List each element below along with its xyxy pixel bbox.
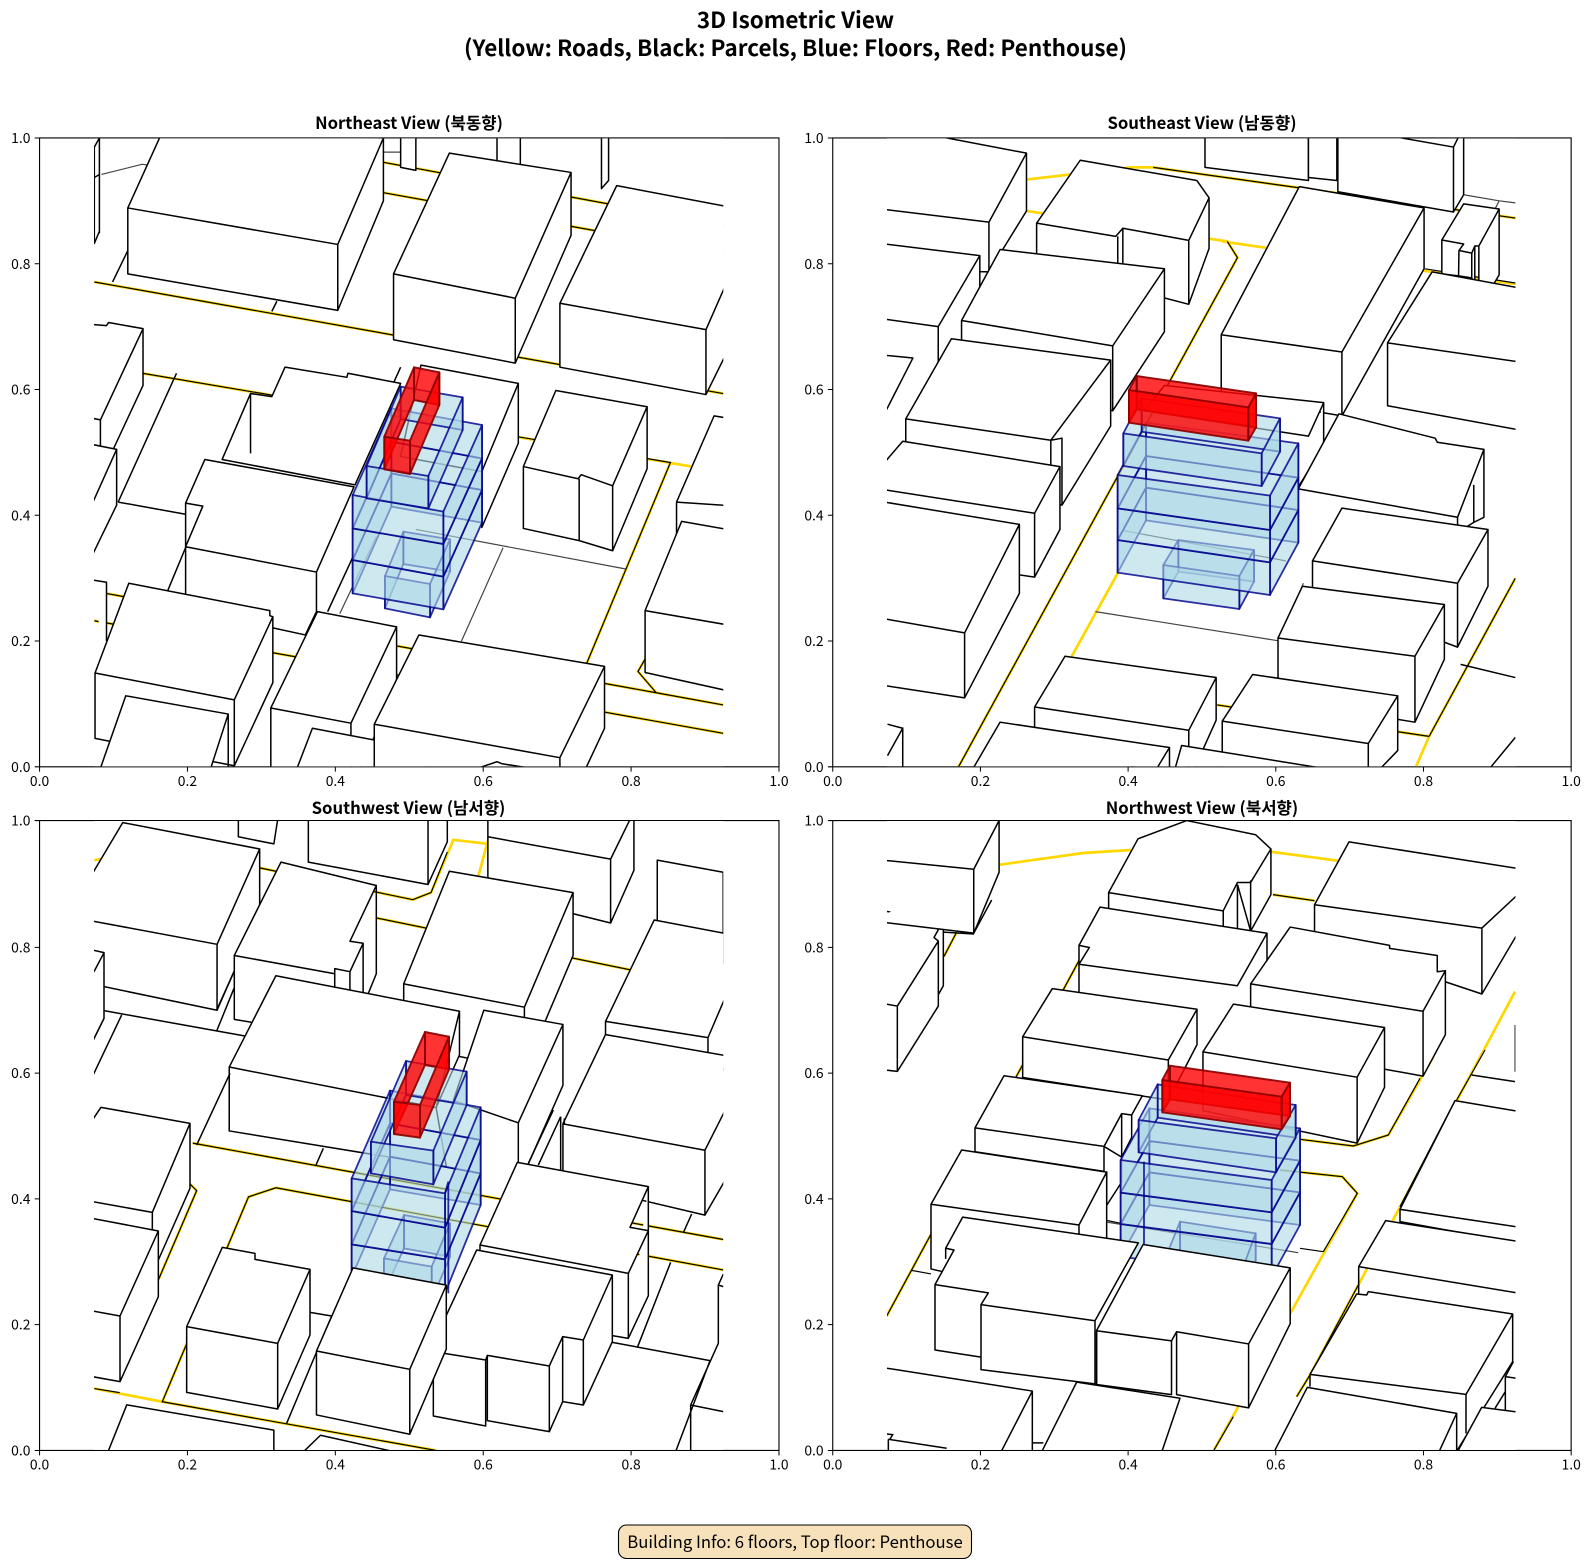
figure title: (Yellow: Roads, Black: Parcels, Blue: Floors, Red: Penthouse) [464,31,1127,63]
left blocks: northwest [873,907,1267,1283]
left blocks and parcels: southwest [83,949,332,1423]
ground floor block [1167,1222,1256,1300]
background buildings: southeast [872,124,1542,698]
ground floor block [385,532,450,617]
ground floor block [1163,540,1254,609]
axes: southwest: 0.4 [11,1189,31,1209]
axes: northeast: 1.0 [769,771,789,791]
axes: southwest: 0.2 [178,1455,197,1475]
axes: northeast: 0.8 [621,771,641,791]
map background: southeast [872,124,1542,767]
foreground buildings: southwest [101,1110,723,1466]
foreground buildings: northwest [880,1075,1520,1457]
axes: southeast [804,128,1581,791]
axes: northwest: 0.0 [823,1455,843,1475]
floor 4 [1121,1108,1300,1212]
floor 2 [1118,488,1298,595]
map background: northwest [872,801,1542,1450]
axes: southwest: 0.8 [621,1455,641,1475]
floor 5 [1139,1084,1296,1172]
roads lower right: northwest [1214,992,1515,1450]
axes: northeast: 0.6 [11,380,31,400]
axes: southeast: 0.2 [971,771,990,791]
axes: southwest: 0.0 [11,1441,31,1461]
axes: northeast: 0.4 [326,771,345,791]
floor 3 [352,1123,481,1259]
map background: southwest [81,811,751,1450]
lower left blocks: northwest [880,1217,1180,1457]
axes: southeast: 0.6 [804,380,824,400]
building floors: northwest [1121,1066,1300,1300]
axes: southwest: 1.0 [11,811,31,831]
building floors: southeast [1118,376,1298,609]
axes: northeast: 1.0 [11,128,31,148]
axes: southeast: 1.0 [804,128,824,148]
axes: northwest: 0.2 [804,1315,824,1335]
floor notch edge [1141,1162,1147,1250]
axes: southeast: 0.2 [804,631,824,651]
floor 5 [367,387,463,508]
axes: northwest: 0.4 [1118,1455,1138,1475]
axes: northeast: 0.4 [11,505,31,525]
axes: southwest: 1.0 [769,1455,789,1475]
axes: northeast: 0.0 [11,757,31,777]
axes: southwest: 0.0 [30,1455,49,1475]
lower right blocks: northwest [1273,1075,1520,1453]
building floors: northeast [353,367,482,617]
axes: southeast: 0.4 [804,505,824,525]
left road: northwest [873,889,1267,1316]
axes: northeast: 0.8 [11,254,31,274]
axes: southeast: 1.0 [1562,771,1581,791]
right cluster: southwest [433,1110,723,1453]
panel: northwest view [804,795,1581,1475]
axes: northwest: 0.6 [1266,1455,1286,1475]
axes: southwest: 0.6 [11,1063,31,1083]
axes: northwest [804,811,1581,1475]
axes: northeast: 0.2 [178,771,197,791]
panel heading: northeast: Northeast View (북동향) [315,110,503,134]
axes: southeast: 0.8 [804,254,824,274]
map background: northeast [81,127,751,766]
panel heading: northwest: Northwest View (북서향) [1106,795,1298,819]
axes: southeast: 0.0 [823,771,843,791]
axes: southwest: 0.8 [11,937,31,957]
callout: building info [618,1525,972,1558]
axes: northwest: 0.8 [804,937,824,957]
panel: southwest view [11,795,789,1475]
axes: southeast: 0.8 [1414,771,1433,791]
floor 2 [353,473,482,609]
floor 5 [371,1061,467,1184]
penthouse [394,1032,449,1138]
floor 2 [352,1157,481,1293]
floor 3 [1118,456,1298,562]
background buildings: northeast [81,127,751,696]
figure title [464,3,1127,63]
axes: southeast: 0.0 [804,757,824,777]
foreground buildings: southeast [972,586,1444,786]
axes: southwest [11,811,789,1475]
axes: northwest: 0.4 [804,1189,824,1209]
axes: northwest: 0.0 [804,1441,824,1461]
axes: northeast: 0.0 [30,771,49,791]
axes: northwest: 1.0 [804,811,824,831]
floor 5 [1123,398,1280,486]
axes: northwest: 0.6 [804,1063,824,1083]
penthouse [384,367,439,474]
axes: southeast: 0.6 [1266,771,1286,791]
axes: southeast: 0.4 [1118,771,1138,791]
axes: northeast: 0.6 [474,771,493,791]
floor 3 [353,442,482,577]
axes: southwest: 0.2 [11,1315,30,1335]
panel: northeast view [11,110,789,824]
axes: northwest: 0.2 [971,1455,990,1475]
axes: northwest: 0.8 [1414,1455,1433,1475]
building floors: southwest [352,1032,481,1300]
callout: building info: Building Info: 6 floors, Top floor: Penthouse [627,1529,963,1553]
axes: southwest: 0.4 [326,1455,345,1475]
floor 4 [352,1091,481,1228]
panel heading: southeast: Southeast View (남동향) [1107,110,1297,134]
floor 2 [1121,1172,1300,1277]
floor 3 [1121,1141,1300,1244]
ground floor block [384,1215,450,1300]
floor notch edge [445,1182,448,1293]
background buildings: southwest [81,811,751,1215]
foreground buildings: northeast [94,582,606,766]
figure title: 3D Isometric View [697,3,894,35]
axes: northwest: 1.0 [1562,1455,1581,1475]
floor 4 [1118,423,1298,530]
axes: northeast [11,128,789,791]
panel heading: southwest: Southwest View (남서향) [312,795,505,819]
penthouse [1162,1066,1290,1129]
penthouse [1129,376,1256,441]
axes: southwest: 0.6 [474,1455,493,1475]
axes: northeast: 0.2 [11,631,30,651]
floor 4 [353,408,482,544]
panel: southeast view [804,110,1581,791]
